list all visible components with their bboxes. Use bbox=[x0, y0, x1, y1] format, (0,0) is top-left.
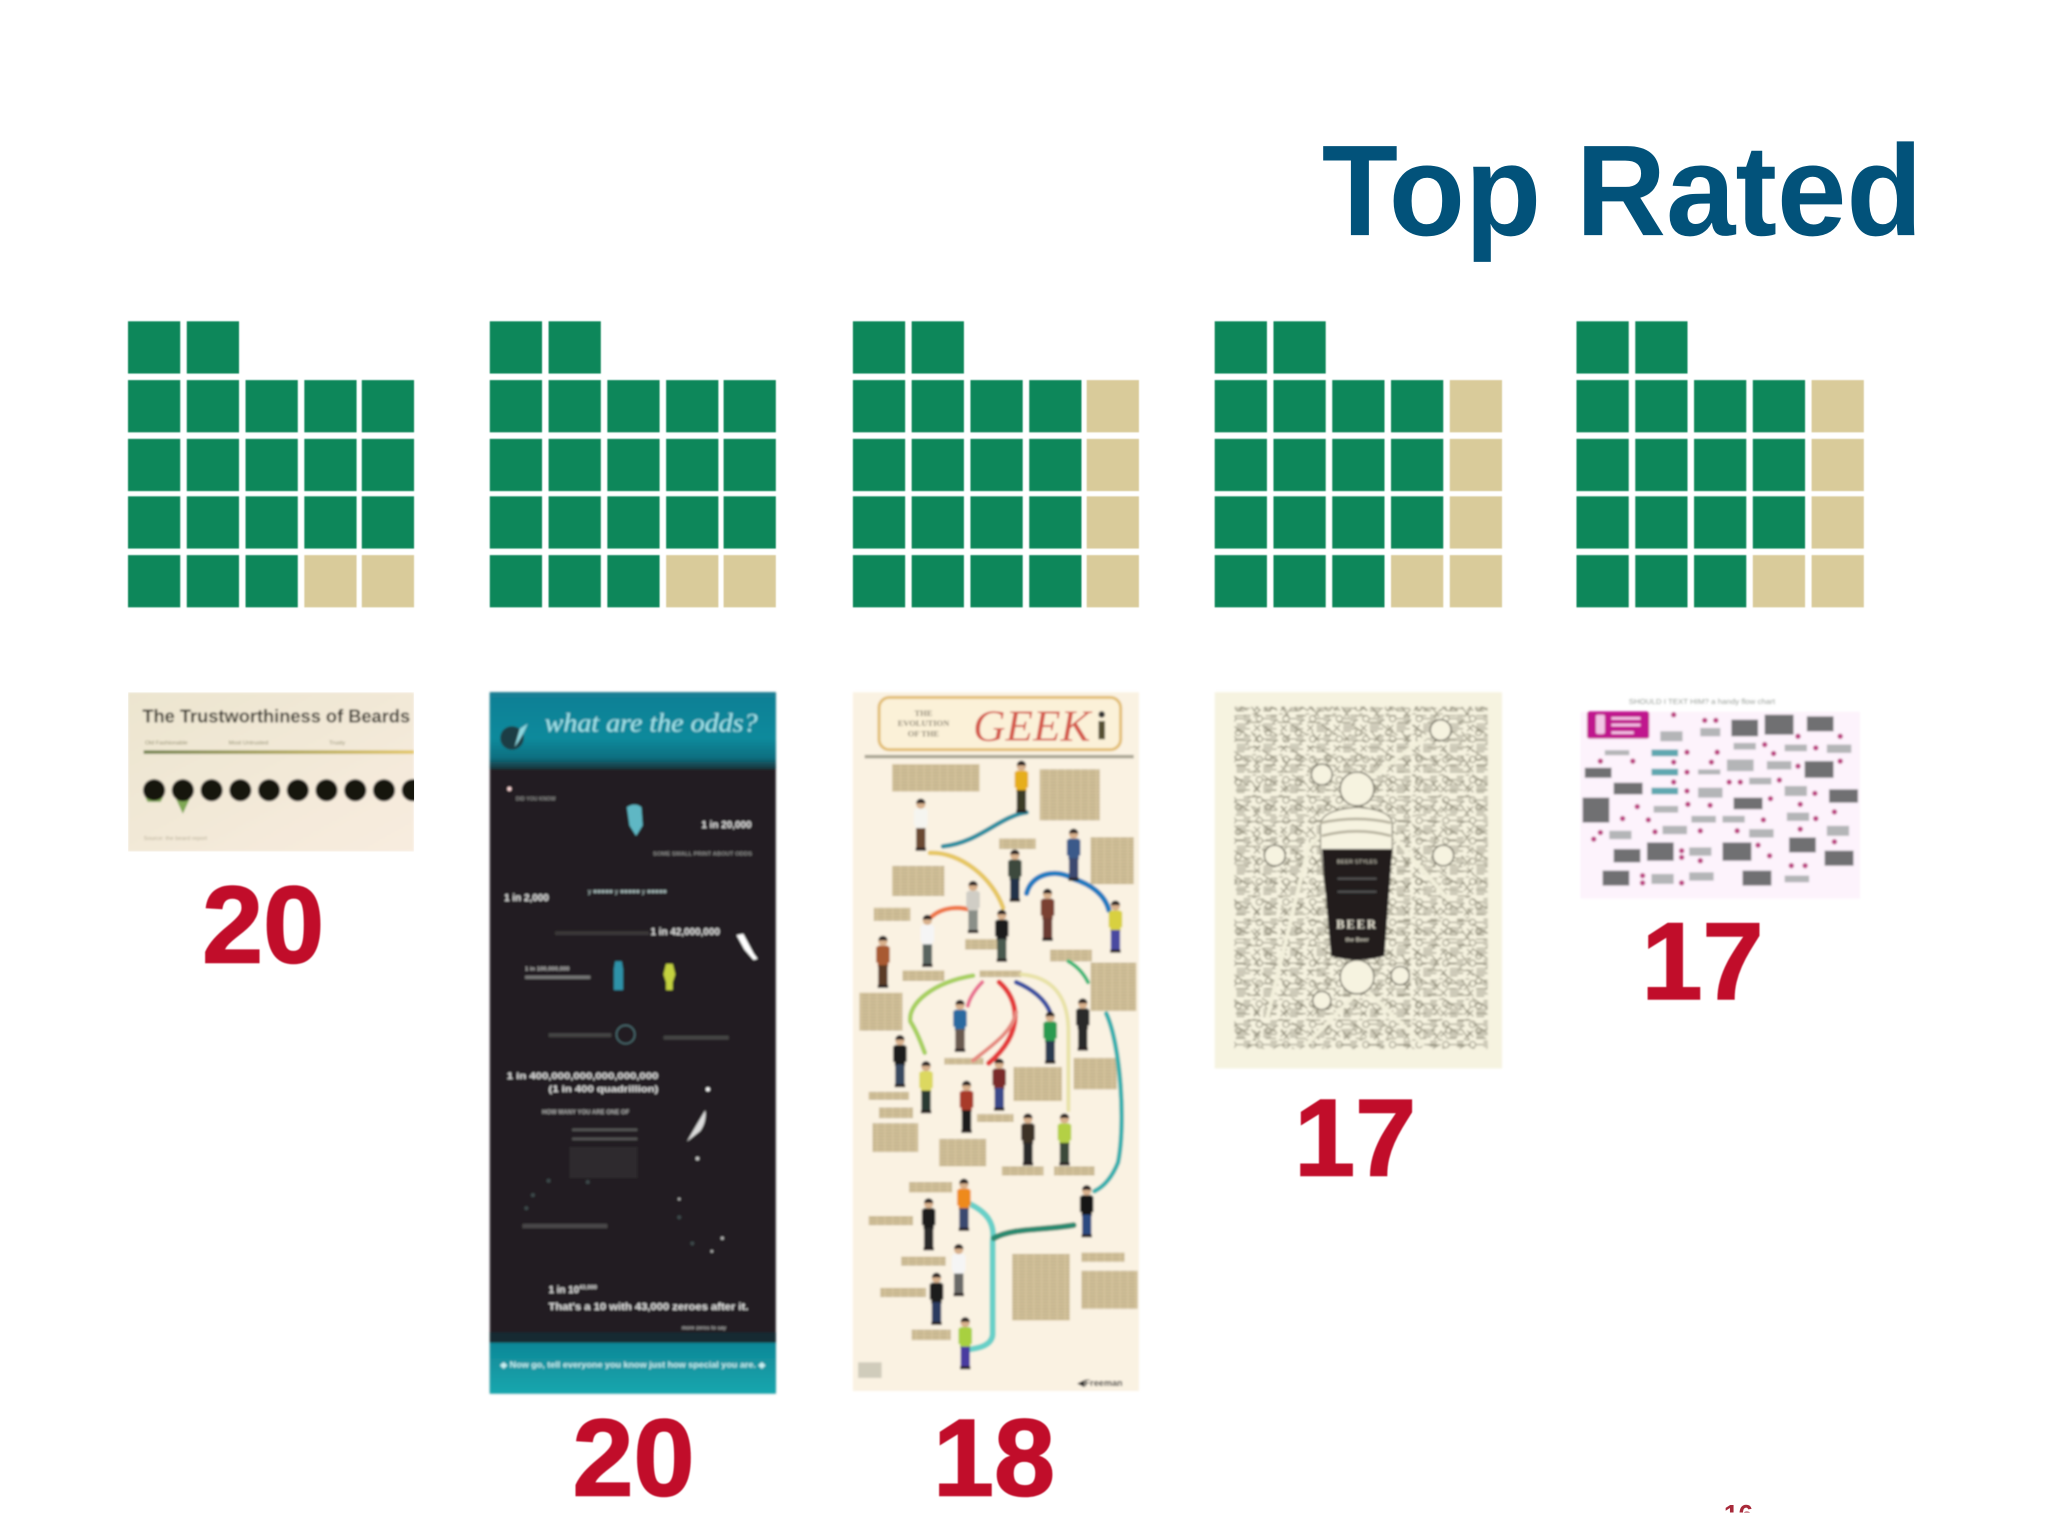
beards timeline: Most Untrusted bbox=[229, 740, 268, 746]
panel: what are the odds thumbnail bbox=[490, 692, 776, 1394]
rating grid: column 2 (20 of 25) bbox=[490, 321, 776, 607]
flowchart teal nodes bbox=[1651, 750, 1678, 794]
odds stat rows: SOME SMALL PRINT ABOUT ODDS bbox=[653, 852, 752, 858]
score: flowchart 17: 17 bbox=[1642, 901, 1764, 1023]
flowchart heading: SHOULD I TEXT HIM? a handy flow chart bbox=[1629, 698, 1775, 706]
geek credits bbox=[858, 1362, 1123, 1388]
rating grid: column 5 (17 of 25) bbox=[1576, 321, 1864, 607]
flowchart dark nodes bbox=[1583, 715, 1858, 886]
beards footer note: Source: the beard report bbox=[144, 836, 208, 842]
score: odds 20: 20 bbox=[572, 1398, 694, 1520]
icon: pint glass: the Beer bbox=[1345, 938, 1370, 944]
odds heading: what are the odds? bbox=[545, 708, 758, 737]
odds stat rows: (1 in 400 quadrillion) bbox=[549, 1084, 658, 1094]
flowchart light nodes bbox=[1605, 728, 1851, 884]
odds stat rows: 43,000 bbox=[579, 1285, 598, 1291]
beards timeline: Old Fashionable bbox=[145, 740, 188, 746]
rating grid: column 4 (17 of 25) bbox=[1215, 321, 1502, 607]
odds stat rows: 1 in 2,000 bbox=[504, 893, 549, 904]
cropped number fragment at the bottom edge: 16 bbox=[1724, 1499, 1753, 1529]
flowchart callout bbox=[1587, 711, 1649, 739]
score: beer 17: 17 bbox=[1294, 1078, 1416, 1200]
panel: flowchart thumbnail bbox=[1580, 698, 1860, 899]
icon: pint glass: BEER STYLES bbox=[1337, 859, 1377, 865]
odds stat rows: DID YOU KNOW bbox=[516, 797, 556, 803]
odds stat rows: more zeros to say bbox=[682, 1326, 726, 1332]
geek credits: ◀Freeman bbox=[1077, 1378, 1123, 1388]
geek heading bbox=[865, 697, 1134, 758]
evolution connector curves bbox=[910, 812, 1122, 1349]
odds footer band bbox=[490, 1332, 776, 1394]
geek heading: THE bbox=[914, 708, 933, 718]
geek heading: EVOLUTION bbox=[898, 718, 949, 728]
panel: beards thumbnail bbox=[128, 692, 424, 852]
odds stat rows bbox=[504, 787, 758, 1332]
odds stat rows: y ■■■■■ y ■■■■■ y ■■■■■ bbox=[588, 888, 667, 895]
odds stat rows: That's a 10 with 43,000 zeroes after it. bbox=[549, 1302, 749, 1313]
panel: beer thumbnail bbox=[1215, 692, 1502, 1068]
beards timeline bbox=[144, 740, 414, 754]
icon: clover bbox=[500, 724, 528, 750]
title: Top Rated bbox=[1322, 119, 1923, 263]
odds stat rows: 1 in 400,000,000,000,000,000 bbox=[507, 1071, 658, 1081]
beer map doodles bbox=[1234, 707, 1488, 1049]
rating grid: column 1 (20 of 25) bbox=[128, 321, 414, 607]
odds stat rows: 1 in 10 bbox=[549, 1285, 579, 1296]
rating grid: column 3 (18 of 25) bbox=[853, 321, 1139, 607]
score: beards 20: 20 bbox=[202, 865, 324, 987]
odds stat rows: 1 in 100,000,000 bbox=[525, 966, 570, 972]
flowchart connector dots bbox=[1591, 712, 1843, 886]
beard face icons bbox=[143, 779, 424, 814]
geek heading: GEEK bbox=[973, 701, 1093, 751]
panel: evolution of the geek thumbnail bbox=[853, 692, 1139, 1391]
geek heading: OF THE bbox=[908, 729, 939, 739]
geek characters bbox=[876, 761, 1122, 1369]
icon: pint glass bbox=[1320, 807, 1392, 960]
odds stat rows: HOW MANY YOU ARE ONE OF bbox=[542, 1110, 630, 1116]
odds stat rows: 1 in 20,000 bbox=[701, 820, 752, 831]
beards timeline: Trusty bbox=[329, 740, 345, 746]
score: geek 18: 18 bbox=[933, 1398, 1055, 1520]
odds footer band: ◆ Now go, tell everyone you know just how special you are. ◆ bbox=[499, 1361, 766, 1370]
icon: pint glass: BEER bbox=[1336, 918, 1378, 932]
text boxes bbox=[859, 764, 1138, 1340]
beards heading: The Trustworthiness of Beards bbox=[142, 705, 410, 726]
beer map branches bbox=[1264, 720, 1454, 1045]
odds stat rows: 1 in 42,000,000 bbox=[650, 927, 720, 938]
